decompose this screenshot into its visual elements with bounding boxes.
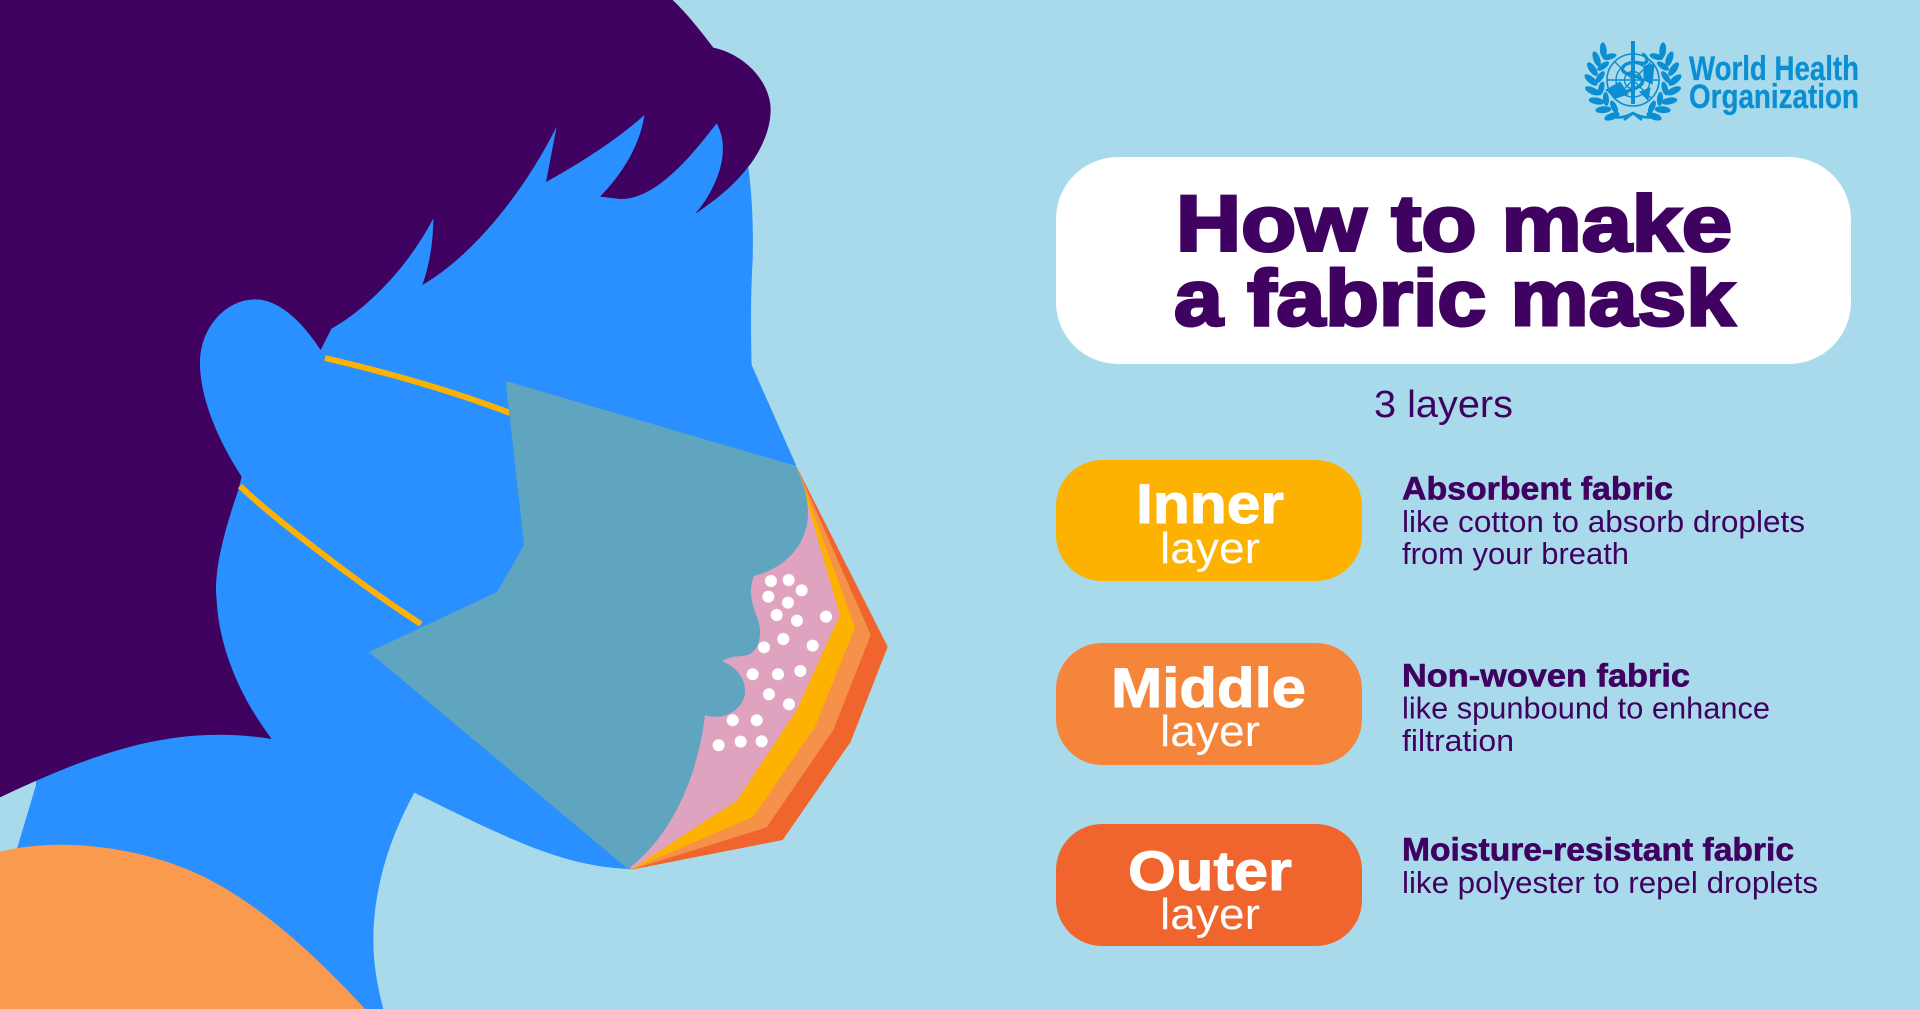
description line 1: like spunbound to enhance	[1402, 690, 1770, 726]
description line 2: from your breath	[1402, 536, 1629, 571]
lower strap	[240, 486, 421, 624]
laurel right	[1645, 42, 1683, 122]
description line 1: like cotton to absorb droplets	[1402, 504, 1805, 539]
badge shape	[1056, 824, 1362, 946]
badge: outer layer	[1056, 824, 1362, 946]
heading	[1174, 178, 1736, 342]
badge subtitle: layer	[1160, 524, 1260, 573]
face and neck	[13, 100, 796, 1009]
row: inner layer	[1056, 460, 1805, 581]
hair and ear outline	[0, 0, 771, 797]
badge shape	[1056, 460, 1362, 581]
icon: WHO emblem	[1583, 41, 1683, 122]
subtitle: 3 layers	[1374, 384, 1513, 426]
outer mask layer	[630, 467, 888, 870]
heading line 1: How to make	[1176, 178, 1732, 268]
WHO logo	[1583, 41, 1859, 122]
badge title: Middle	[1111, 656, 1306, 719]
badge subtitle: layer	[1160, 707, 1260, 756]
row: outer layer	[1056, 824, 1818, 946]
middle mask layer	[630, 467, 871, 870]
illustration: person wearing a fabric mask	[0, 0, 888, 1009]
badge: inner layer	[1056, 460, 1362, 581]
badge title: Outer	[1128, 839, 1292, 902]
Organization: Organization	[1689, 78, 1859, 116]
row: middle layer	[1056, 643, 1770, 765]
title background	[1056, 157, 1851, 364]
droplets	[713, 574, 832, 751]
globe, ribbon, staff and serpent	[1606, 41, 1660, 120]
description line 1: like polyester to repel droplets	[1402, 865, 1818, 900]
description: non-woven fabric	[1402, 658, 1770, 758]
laurel left	[1583, 42, 1621, 122]
badge title: Inner	[1136, 472, 1284, 535]
badge subtitle: layer	[1160, 890, 1260, 939]
heading line 2: a fabric mask	[1174, 253, 1736, 342]
mask straps	[240, 358, 510, 624]
description: absorbent fabric	[1402, 470, 1805, 571]
description line 2: filtration	[1402, 723, 1514, 758]
badge: middle layer	[1056, 643, 1362, 765]
shoulder	[0, 845, 365, 1009]
description: moisture-resistant fabric	[1402, 832, 1818, 900]
logo wordmark	[1689, 50, 1859, 116]
description heading: Moisture-resistant fabric	[1402, 832, 1794, 868]
title panel	[1056, 157, 1851, 364]
description heading: Non-woven fabric	[1402, 658, 1690, 694]
pink mask lining	[630, 467, 840, 870]
upper strap	[325, 358, 510, 413]
description heading: Absorbent fabric	[1402, 470, 1673, 506]
inner mask layer	[630, 467, 855, 870]
badge shape	[1056, 643, 1362, 765]
World Health: World Health	[1689, 50, 1859, 88]
translucent mask panel over the face	[369, 381, 808, 869]
